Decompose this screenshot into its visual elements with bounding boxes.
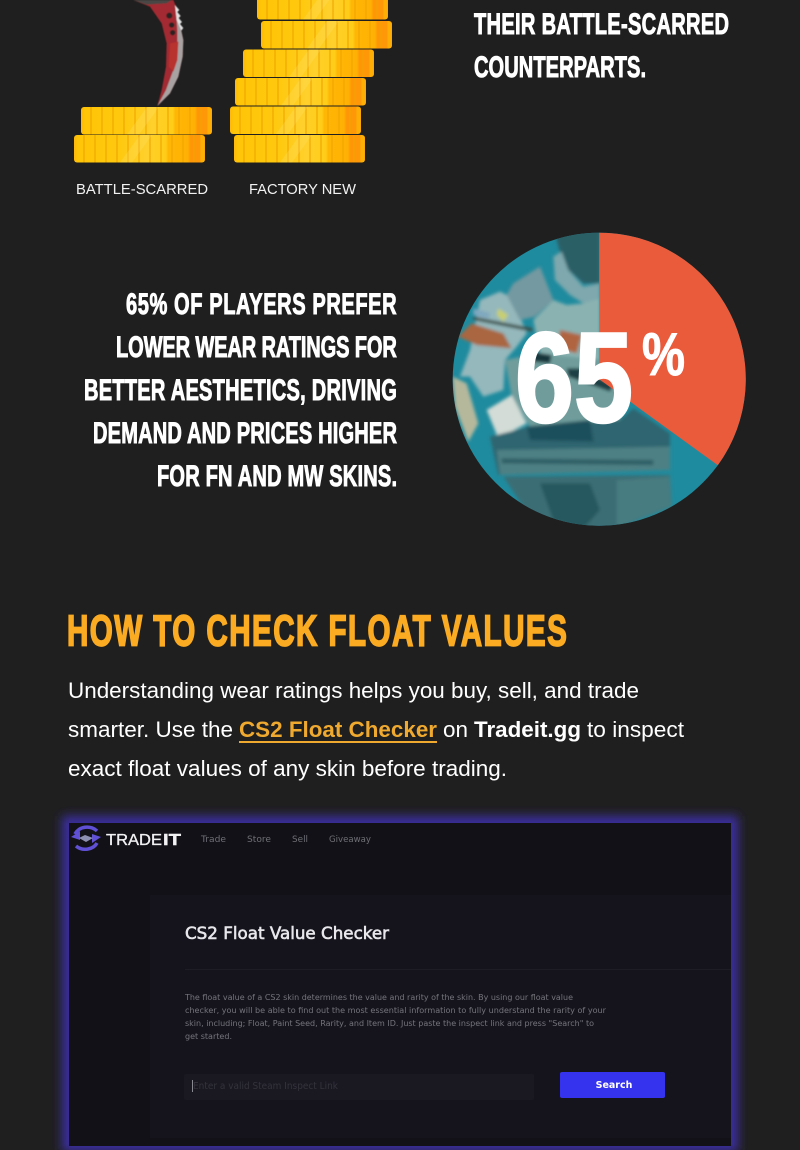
value: percent sign: % bbox=[642, 321, 685, 388]
search input: Enter a valid Steam Inspect Link bbox=[193, 1081, 338, 1092]
text block: counterparts statement bbox=[474, 8, 729, 84]
value: 65: 65 bbox=[515, 307, 633, 450]
link: CS2 Float Checker: CS2 Float Checker bbox=[239, 717, 437, 742]
text block: player preference statement: FOR FN AND MW SKINS. bbox=[157, 460, 397, 493]
search button: Search bbox=[596, 1080, 633, 1091]
screenshot description: get started. bbox=[185, 1032, 232, 1041]
screenshot title: CS2 Float Value Checker bbox=[185, 924, 389, 944]
screenshot description bbox=[184, 993, 607, 1041]
text block: float checker intro: to inspect bbox=[587, 717, 684, 742]
text block: float checker intro: Understanding wear ratings helps you buy, sell, and trade bbox=[68, 678, 639, 703]
pie slice: 35 percent bbox=[599, 233, 746, 465]
text block: float checker intro: exact float values of any skin before trading. bbox=[68, 756, 507, 781]
icon: battle-scarred coin stack bbox=[74, 107, 212, 162]
heading: how to check float values: HOW TO CHECK FLOAT VALUES bbox=[67, 606, 567, 655]
search input bbox=[184, 1074, 534, 1100]
screenshot description: The float value of a CS2 skin determines the value and rarity of the skin. By using our float value bbox=[184, 993, 573, 1002]
chart: 65 percent pie bbox=[453, 230, 746, 528]
navigation: Giveaway bbox=[329, 835, 372, 845]
screenshot description: skin, including; Float, Paint Seed, Rarity, and Item ID. Just paste the inspect link and press "Search" to bbox=[185, 1019, 594, 1028]
text block: counterparts statement: THEIR BATTLE-SCARRED bbox=[474, 8, 729, 41]
text block: float checker intro: on bbox=[443, 717, 468, 742]
text block: player preference statement: LOWER WEAR RATINGS FOR bbox=[116, 331, 397, 364]
navigation bbox=[200, 835, 372, 845]
text block: float checker intro: smarter. Use the bbox=[68, 717, 233, 742]
navigation: Sell bbox=[292, 835, 308, 845]
text block: float checker intro: Tradeit.gg bbox=[474, 717, 581, 742]
icon: tradeit logo bbox=[71, 827, 101, 849]
search button bbox=[560, 1072, 665, 1098]
text block: player preference statement bbox=[84, 288, 397, 493]
panel: float checker screenshot bbox=[62, 816, 738, 1150]
logo wordmark: TRADE bbox=[106, 832, 162, 849]
navigation: Trade bbox=[200, 835, 226, 845]
icon: knife blade bbox=[133, 0, 183, 106]
screenshot description: checker, you will be able to find out the most essential information to fully understand the rarity of your bbox=[185, 1006, 607, 1015]
logo wordmark: IT bbox=[163, 832, 181, 849]
icon: factory new coin stack bbox=[230, 0, 392, 162]
text block: counterparts statement: COUNTERPARTS. bbox=[474, 51, 646, 84]
text block: player preference statement: 65% OF PLAYERS PREFER bbox=[126, 288, 397, 321]
panel: price comparison coins bbox=[74, 0, 392, 198]
label: factory new: FACTORY NEW bbox=[249, 182, 356, 198]
text block: player preference statement: BETTER AESTHETICS, DRIVING bbox=[84, 374, 397, 407]
illustration: soldier in teal tint bbox=[453, 230, 672, 528]
text block: player preference statement: DEMAND AND PRICES HIGHER bbox=[93, 417, 397, 450]
navigation: Store bbox=[247, 835, 271, 845]
text block: float checker intro bbox=[68, 678, 684, 781]
label: battle-scarred: BATTLE-SCARRED bbox=[76, 182, 208, 198]
